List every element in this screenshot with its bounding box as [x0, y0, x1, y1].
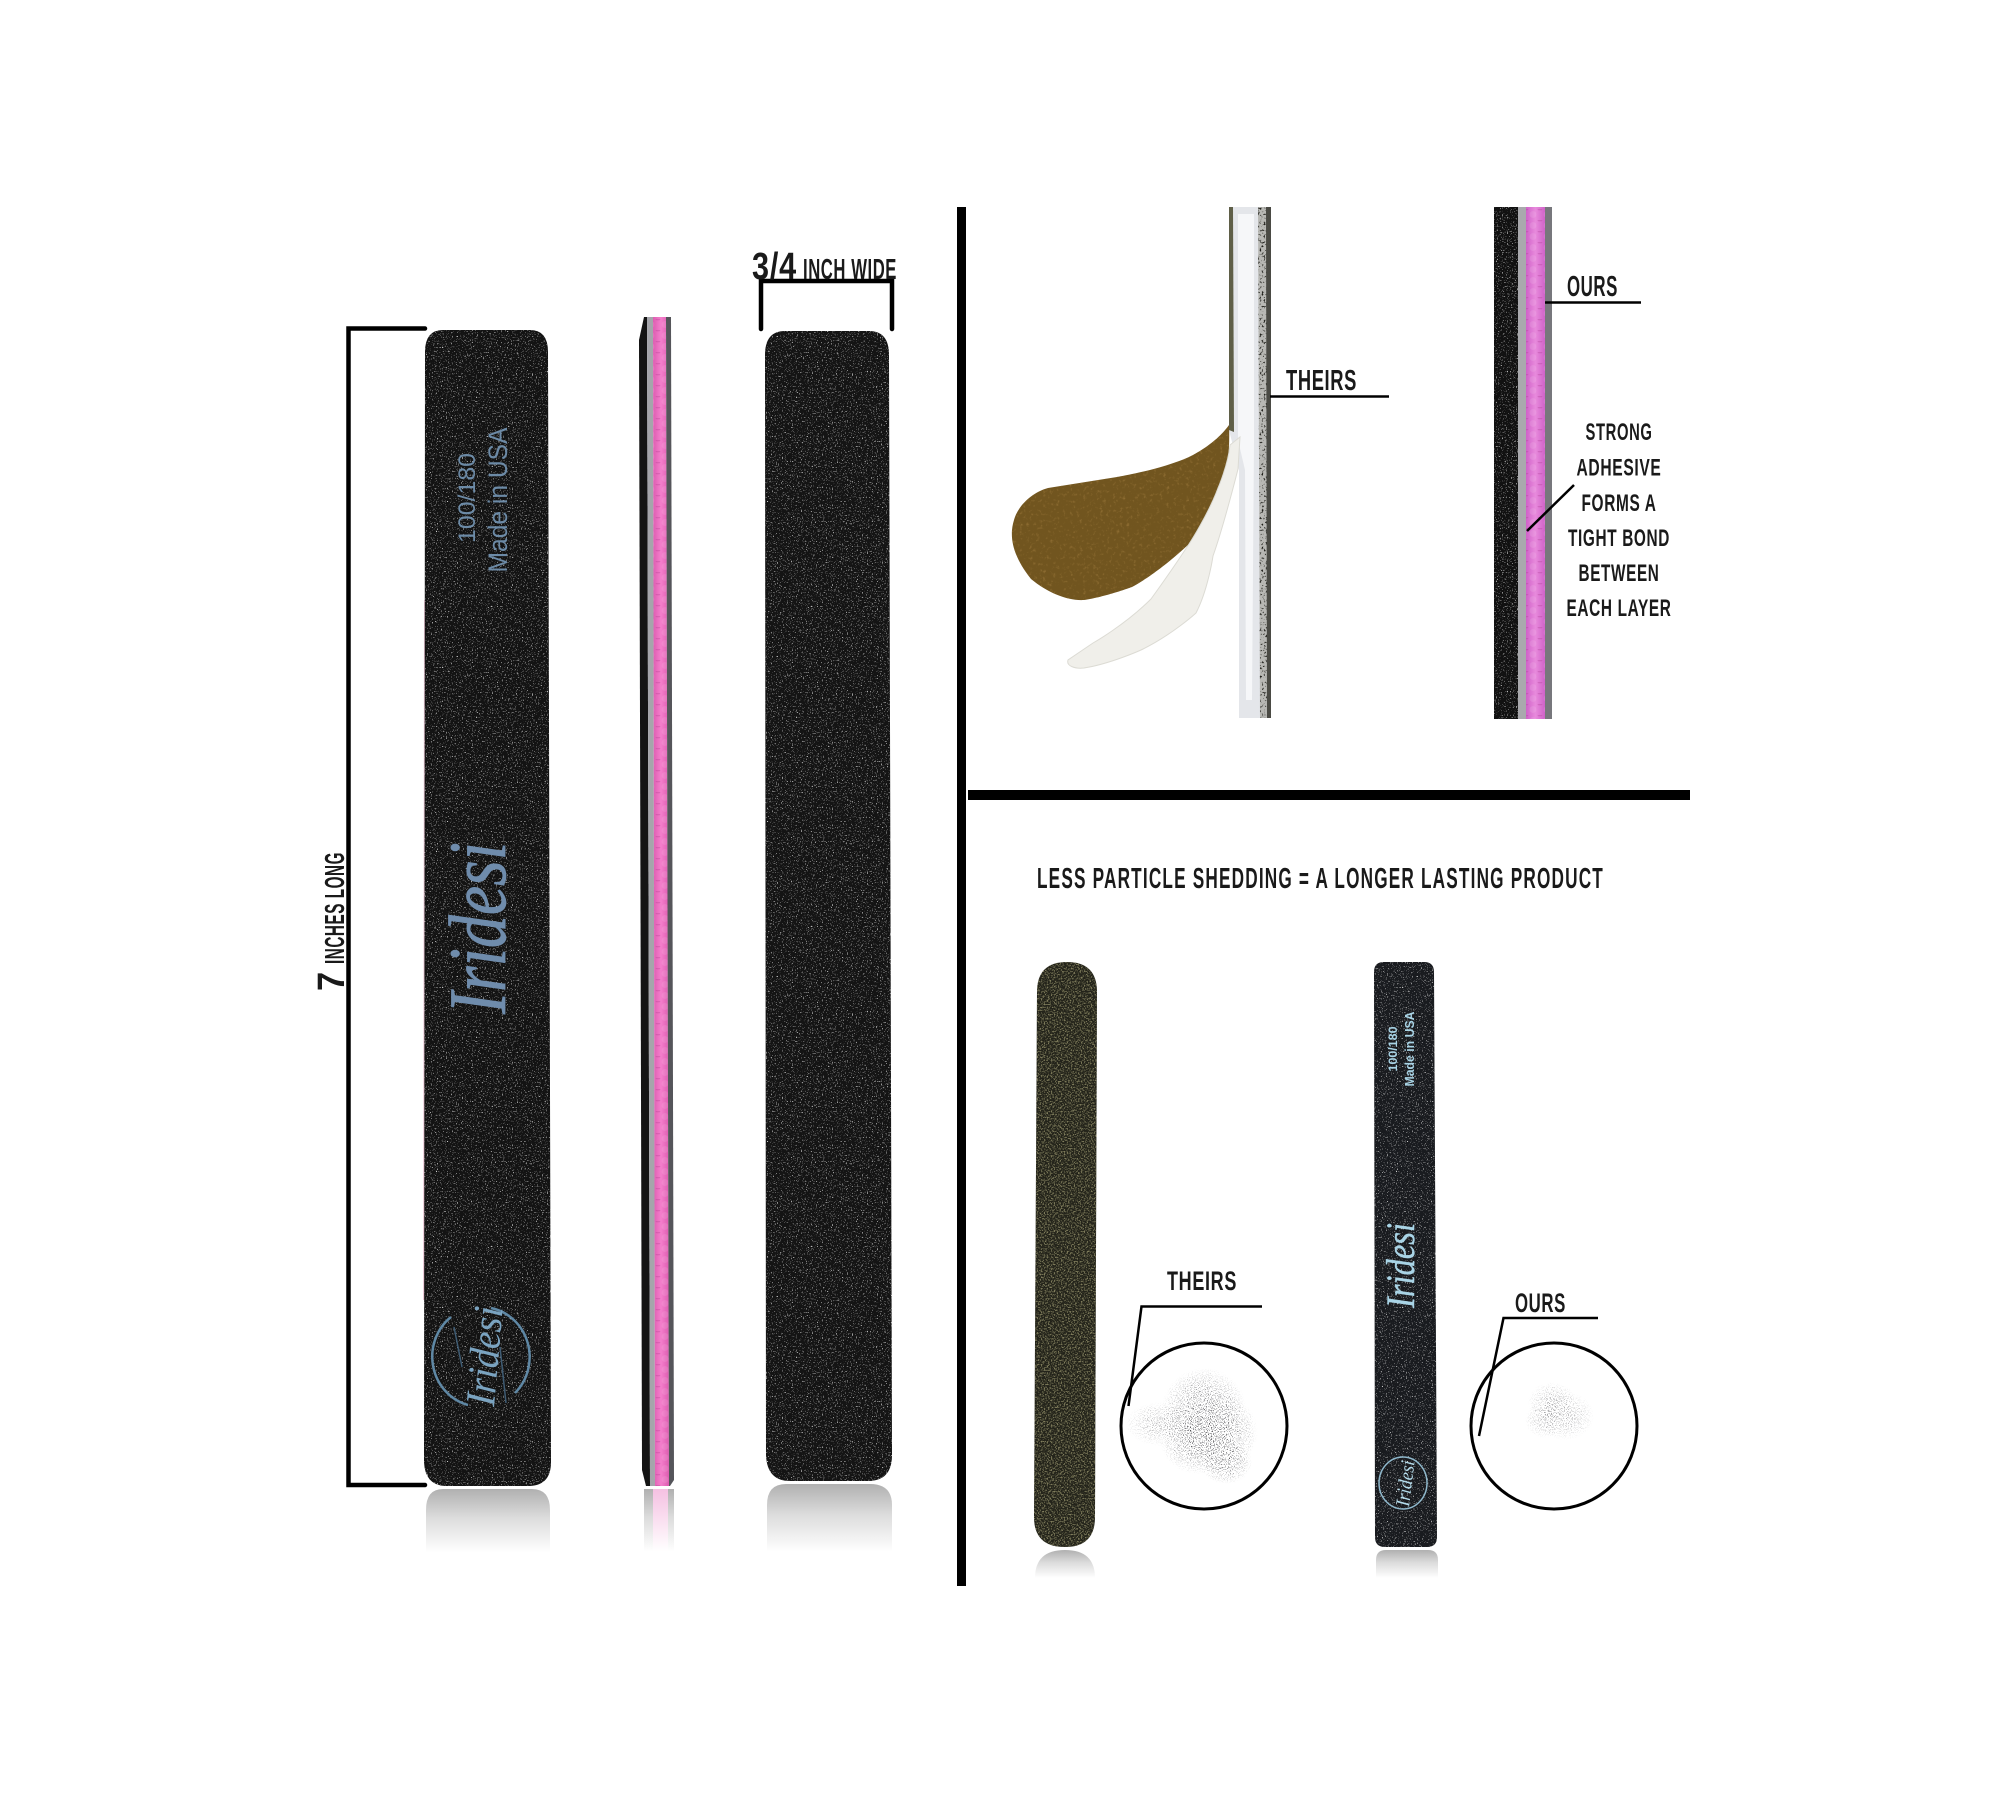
reflection: ours file: [1376, 1550, 1438, 1578]
pink edge: [424, 600, 425, 1300]
ours dust sample: [1471, 1343, 1637, 1509]
heading: LESS PARTICLE SHEDDING = A LONGER LASTING PRODUCT: [1037, 863, 1604, 895]
adhesive callout text: [1566, 419, 1672, 622]
circular logo: [432, 1304, 530, 1409]
label: 7 inches long: [311, 852, 353, 991]
ours file: [1374, 962, 1437, 1547]
circular logo: Iridesi: [458, 1304, 513, 1409]
label: ours: [1545, 271, 1641, 303]
origin text: Made in USA: [1403, 1012, 1417, 1086]
label: 3/4 inch wide: INCH WIDE: [803, 254, 897, 286]
theirs: delaminated file edge: [1012, 207, 1271, 718]
reflection: back view: [767, 1484, 892, 1552]
circular logo: Iridesi: [1392, 1459, 1420, 1508]
peeling brown layer: [1012, 425, 1229, 600]
label: 7 inches long: 7: [311, 971, 353, 991]
reflection: side view: [644, 1489, 674, 1552]
label: 3/4 inch wide: 3/4: [752, 246, 797, 288]
adhesive callout text: FORMS A: [1582, 490, 1656, 517]
label: ours: OURS: [1567, 271, 1618, 303]
grit text: 100/180: [1388, 1027, 1400, 1071]
theirs file: [1034, 962, 1097, 1547]
adhesive callout text: EACH LAYER: [1566, 595, 1672, 622]
file back view: [765, 331, 892, 1481]
horizontal divider: [968, 790, 1690, 800]
file body: [424, 330, 551, 1486]
panel: particle shedding: [1034, 863, 1637, 1578]
file side view: [639, 317, 674, 1486]
theirs dust sample: [1121, 1343, 1287, 1509]
brand wordmark: Iridesi: [1378, 1223, 1423, 1309]
adhesive callout text: ADHESIVE: [1576, 454, 1662, 482]
file front view: [424, 330, 551, 1486]
length bracket: [348, 328, 425, 1485]
adhesive callout text: BETWEEN: [1578, 560, 1660, 587]
label: ours: [1479, 1288, 1598, 1436]
width bracket: [761, 281, 892, 329]
label: 7 inches long: INCHES LONG: [319, 852, 350, 964]
panel: layer comparison: [1012, 207, 1672, 719]
vertical divider: [957, 207, 966, 1586]
origin text: Made in USA: [483, 428, 513, 572]
grit text: 100/180: [454, 453, 481, 543]
circular logo: [1379, 1457, 1427, 1509]
label: ours: OURS: [1515, 1288, 1566, 1318]
reflection: theirs file: [1035, 1550, 1095, 1578]
reflection: front view: [426, 1489, 550, 1553]
peeling white layer: [1068, 437, 1240, 668]
adhesive callout text: STRONG: [1586, 419, 1652, 446]
label: theirs: [1128, 1266, 1262, 1406]
adhesive callout text: TIGHT BOND: [1568, 525, 1670, 552]
label: 3/4 inch wide: [752, 246, 897, 288]
label: theirs: THEIRS: [1286, 365, 1357, 397]
label: theirs: THEIRS: [1167, 1266, 1237, 1296]
panel: product dimensions: [311, 246, 897, 1553]
ours: bonded file edge: [1494, 207, 1552, 719]
brand wordmark: Iridesi: [432, 842, 523, 1015]
adhesive leader line: [1527, 485, 1574, 531]
